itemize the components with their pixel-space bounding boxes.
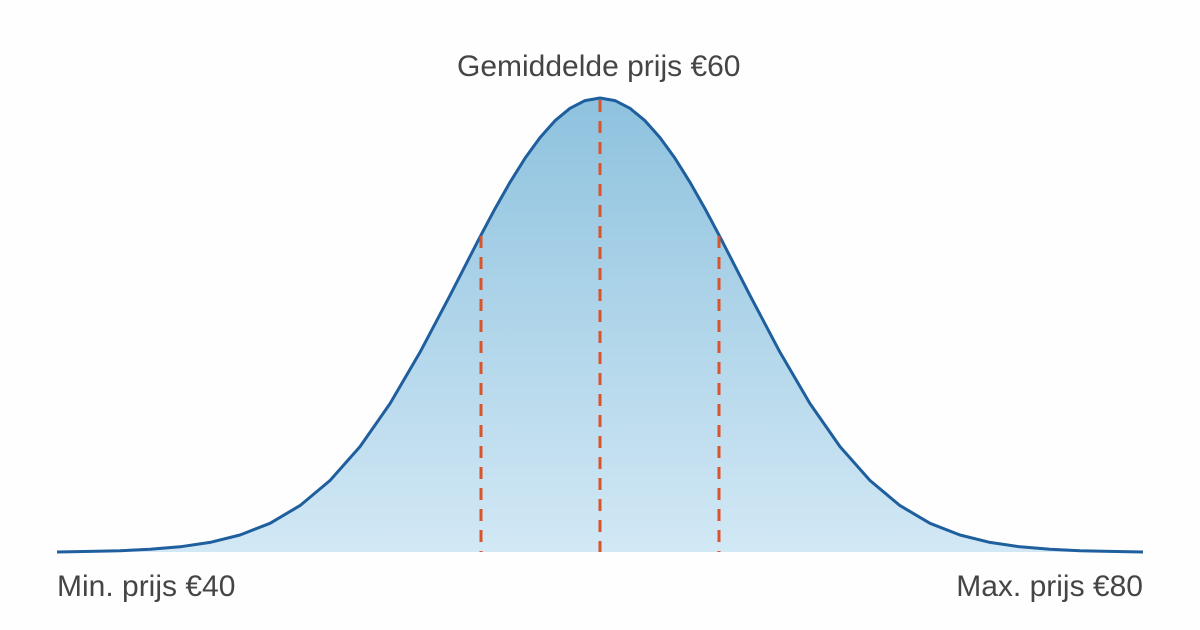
- label: min: Min. prijs €40: [57, 570, 235, 603]
- label: max: Max. prijs €80: [956, 570, 1143, 603]
- dashed lines: mean and ±1 sd: [481, 100, 719, 552]
- curve area: [57, 98, 1143, 552]
- label: mean: Gemiddelde prijs €60: [457, 50, 740, 83]
